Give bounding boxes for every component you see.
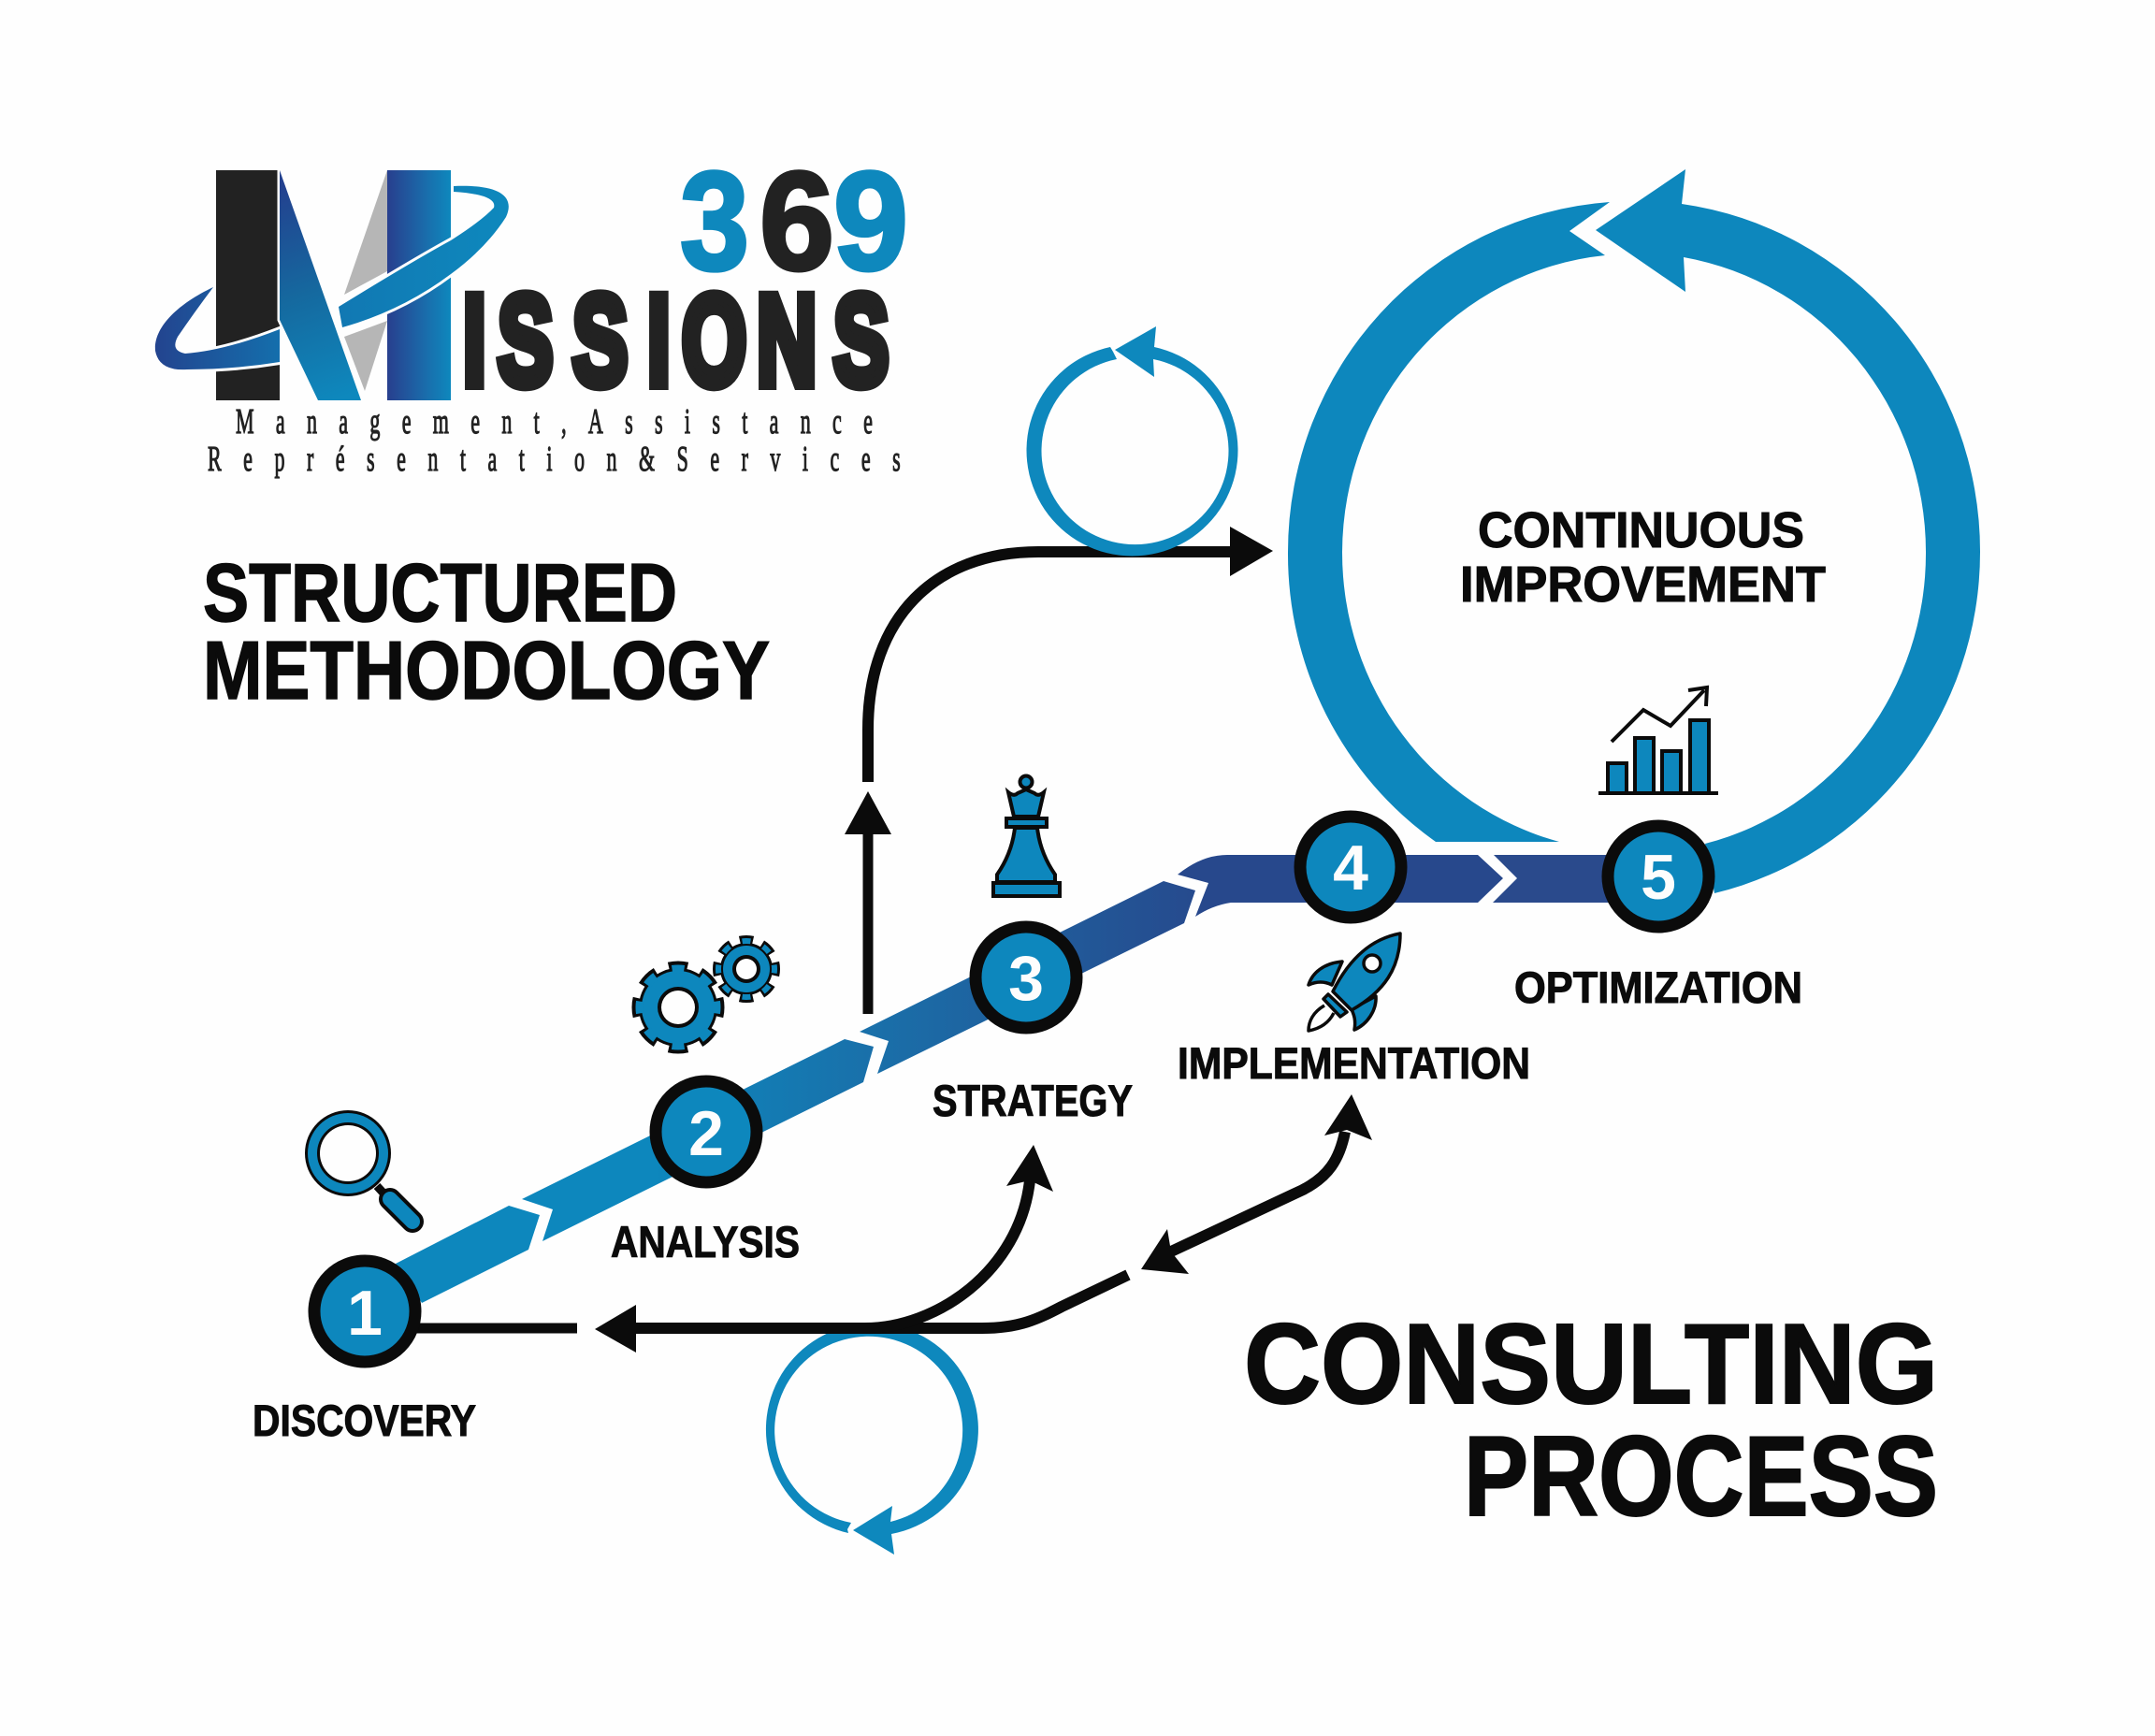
step 3 node: 3 bbox=[1008, 943, 1044, 1014]
step 2 node bbox=[656, 1081, 757, 1182]
process ribbon bbox=[396, 855, 1665, 1303]
step 4 node: 4 bbox=[1333, 832, 1368, 904]
heading: consulting process bbox=[1244, 1300, 1938, 1540]
continuous improvement ring bbox=[1288, 169, 1980, 893]
logo number 369: 3 bbox=[680, 142, 749, 299]
label: discovery: DISCOVERY bbox=[253, 1396, 476, 1445]
heading: structured methodology bbox=[203, 546, 770, 716]
logo number 369: 9 bbox=[833, 142, 908, 299]
step 5: optimization bbox=[1514, 687, 1802, 1012]
icon: growth bar chart bbox=[1598, 687, 1718, 795]
step 5 node bbox=[1608, 826, 1709, 927]
step 2: analysis bbox=[611, 940, 800, 1266]
step 4 node bbox=[1300, 817, 1401, 918]
heading: consulting process: PROCESS bbox=[1464, 1412, 1938, 1540]
loop icon: small bottom cycle arrow bbox=[766, 1324, 978, 1555]
loop icon: small top cycle arrow bbox=[1027, 326, 1237, 557]
icon: magnifying glass bbox=[305, 1110, 412, 1222]
heading: consulting process: CONSULTING bbox=[1244, 1300, 1938, 1427]
arrow: upward path to top loop bbox=[845, 527, 1273, 1014]
logo tagline line 2: Représentation&Services bbox=[208, 439, 901, 479]
logo: 369 Missions bbox=[155, 142, 908, 479]
continuous improvement label: CONTINUOUS bbox=[1478, 502, 1804, 558]
step 5 node: 5 bbox=[1641, 842, 1676, 913]
logo tagline line 1: Management,Assistance bbox=[236, 401, 873, 441]
icon: chess queen bbox=[993, 776, 1060, 896]
heading: structured methodology: STRUCTURED bbox=[203, 546, 677, 639]
step 3: strategy bbox=[933, 776, 1133, 1125]
continuous improvement label: IMPROVEMENT bbox=[1460, 557, 1826, 613]
logo number 369 bbox=[680, 142, 908, 299]
step 1 node bbox=[314, 1261, 415, 1362]
continuous improvement label bbox=[1460, 502, 1826, 613]
label: analysis: ANALYSIS bbox=[611, 1217, 800, 1266]
step 4: implementation bbox=[1178, 817, 1530, 1088]
icon: gears bbox=[639, 940, 775, 1047]
arrow: feedback lines to discovery, strategy, implementation bbox=[412, 1094, 1372, 1353]
step 1: discovery bbox=[253, 1110, 476, 1445]
heading: structured methodology: METHODOLOGY bbox=[203, 624, 770, 716]
step 3 node bbox=[976, 927, 1077, 1028]
logo wordmark: ISSIONS bbox=[463, 269, 889, 412]
logo emblem: stylised M with orbit swoosh bbox=[155, 170, 509, 400]
logo number 369: 6 bbox=[759, 142, 834, 299]
step 2 node: 2 bbox=[688, 1098, 724, 1169]
label: implementation: IMPLEMENTATION bbox=[1178, 1038, 1530, 1088]
icon: rocket bbox=[1309, 933, 1400, 1031]
label: optimization: OPTIMIZATION bbox=[1514, 962, 1802, 1012]
label: strategy: STRATEGY bbox=[933, 1076, 1133, 1125]
step 1 node: 1 bbox=[347, 1278, 383, 1349]
